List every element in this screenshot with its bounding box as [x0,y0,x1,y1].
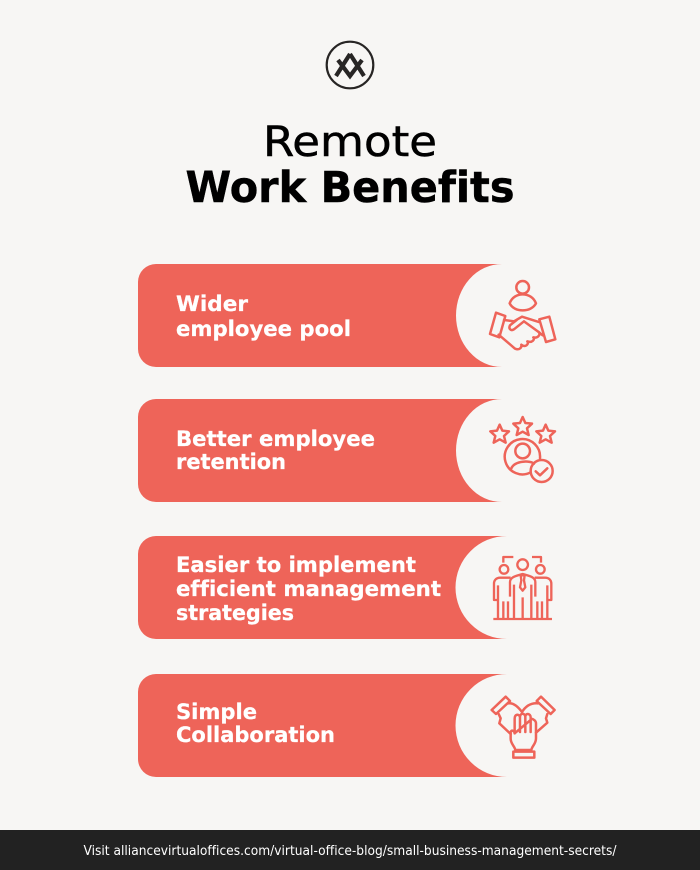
text: simple collaboration: Collaboration [176,723,335,747]
text: better employee retention: Better employee [176,427,375,451]
icon: team [493,557,552,619]
title: Work Benefits [186,163,514,213]
text: simple collaboration [176,700,335,747]
text: wider employee pool [176,292,351,341]
panel: better employee retention [138,399,555,502]
text: easier to implement efficient management strategies: strategies [176,601,294,625]
text: better employee retention: retention [176,450,286,474]
text: easier to implement efficient management strategies: Easier to implement [176,553,416,577]
footer [0,830,700,870]
text: simple collaboration: Simple [176,700,257,724]
text: easier to implement efficient management strategies: efficient management [176,577,441,601]
footer: Visit alliancevirtualoffices.com/virtual-office-blog/small-business-management-secrets/ [84,844,617,859]
panel: simple collaboration [138,674,555,777]
text: better employee retention [176,427,375,474]
icon: stacked hands [492,697,555,758]
icon: stars and person [490,417,555,482]
panel: efficient management [138,536,552,639]
panel: wider employee pool [138,264,555,367]
text: wider employee pool: employee pool [176,317,351,341]
text: wider employee pool: Wider [176,292,249,316]
title [186,117,514,213]
title: Remote [263,117,437,166]
icon: handshake [490,281,555,349]
text: easier to implement efficient management strategies [176,553,441,625]
logo [327,42,373,88]
